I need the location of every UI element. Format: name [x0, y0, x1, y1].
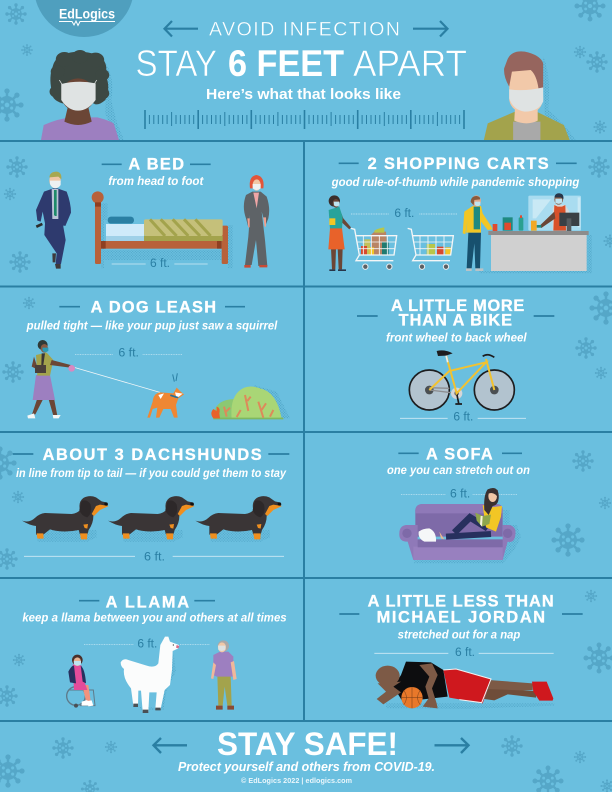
subheading: one you can stretch out on — [387, 464, 530, 477]
icon: shopping cart with groceries — [351, 227, 397, 269]
leash — [75, 368, 160, 392]
heading: A LITTLE MORE — [391, 297, 524, 315]
icon: man in suit — [36, 172, 71, 269]
panel grid lines — [0, 141, 612, 721]
woman with mask, header left — [41, 50, 124, 140]
icon: woman walking dog — [27, 340, 75, 418]
panel: a llama — [22, 593, 287, 713]
footer — [154, 726, 468, 785]
6 feet: 6 FEET — [228, 43, 344, 84]
icon: bicycle — [409, 350, 514, 410]
measure: 6 ft: 6 ft. — [137, 636, 157, 650]
man with mask, header right — [484, 51, 576, 140]
icon: dog — [147, 373, 184, 418]
arrow left — [164, 21, 198, 36]
stay: STAY — [136, 43, 217, 84]
measure: 6 ft — [351, 206, 458, 220]
panel: a little more than a bike — [357, 297, 554, 423]
measure: 6 ft — [84, 636, 209, 650]
measure: 6 ft: 6 ft. — [450, 487, 470, 501]
header title block — [136, 19, 467, 103]
panel: a sofa — [387, 445, 530, 563]
panel: a little less than michael jordan — [339, 593, 583, 709]
measure: 6 ft: 6 ft. — [394, 206, 414, 220]
measure: 6 ft — [401, 487, 518, 501]
heading: THAN A BIKE — [399, 312, 512, 330]
measure: 6 ft — [75, 346, 183, 360]
icon: second shopping cart — [408, 228, 453, 269]
measure: 6 ft — [400, 409, 526, 423]
measure: 6 ft: 6 ft. — [453, 409, 473, 423]
icon: dachshund 3 — [195, 496, 282, 542]
heading: MICHAEL JORDAN — [377, 609, 545, 627]
apart: APART — [353, 43, 467, 84]
icon: dachshund 1 — [22, 496, 109, 542]
heading — [391, 297, 524, 330]
measure: 6 ft: 6 ft. — [455, 645, 475, 659]
measure: 6 ft: 6 ft. — [118, 346, 139, 360]
measure: 6 ft — [112, 256, 208, 270]
subheading: stretched out for a nap — [398, 628, 520, 641]
icon: person in wheelchair — [67, 655, 95, 708]
subtitle: Here’s what that looks like — [206, 86, 401, 103]
icon: older man — [211, 640, 237, 710]
icon: sleeping basketball player — [376, 662, 554, 709]
arrow right — [434, 738, 468, 753]
heading: A DOG LEASH — [91, 299, 216, 317]
icon: checkout counter with cashier — [479, 193, 592, 273]
subheading: pulled tight — like your pup just saw a squirrel — [26, 319, 278, 332]
heading: 2 SHOPPING CARTS — [368, 155, 549, 173]
measure: 6 ft: 6 ft. — [144, 550, 165, 564]
icon: bush with squirrel — [211, 385, 290, 419]
panel: 2 shopping carts — [328, 155, 592, 273]
tagline: Protect yourself and others from COVID-19. — [178, 760, 435, 774]
heading: A LLAMA — [106, 593, 189, 611]
ruler — [145, 110, 464, 129]
icon: cat — [419, 528, 436, 542]
heading: A LITTLE LESS THAN — [368, 593, 554, 611]
arrow right — [413, 21, 448, 36]
heading — [368, 593, 554, 627]
subheading: front wheel to back wheel — [386, 332, 527, 345]
icon: shopper man — [463, 195, 497, 271]
icon: sofa — [399, 504, 521, 563]
icon: bed — [92, 191, 233, 268]
subheading: keep a llama between you and others at all times — [22, 612, 287, 625]
heading: ABOUT 3 DACHSHUNDS — [43, 446, 262, 464]
icon: dachshund 2 — [108, 496, 195, 542]
subheading: good rule-of-thumb while pandemic shopping — [331, 176, 579, 189]
icon: woman in gray suit — [244, 175, 269, 268]
logo badge — [34, 0, 134, 37]
copyright: © EdLogics 2022 | edlogics.com — [241, 776, 352, 785]
panel: a bed — [36, 155, 269, 270]
icon: woman reading — [439, 488, 502, 539]
panel: about 3 dachshunds — [13, 446, 289, 564]
logo badge: EdLogics — [59, 6, 115, 22]
arrow left — [154, 738, 187, 753]
stay safe: STAY SAFE! — [217, 726, 398, 762]
measure: 6 ft: 6 ft. — [150, 256, 170, 270]
icon: shopper woman — [328, 195, 351, 271]
heading: A BED — [128, 155, 184, 173]
subheading: in line from tip to tail — if you could get them to stay — [16, 467, 286, 480]
subheading: from head to foot — [108, 175, 204, 188]
heading: A SOFA — [426, 445, 493, 463]
panel: a dog leash — [26, 299, 290, 419]
icon: llama — [121, 637, 179, 713]
avoid infection: AVOID INFECTION — [209, 19, 400, 41]
